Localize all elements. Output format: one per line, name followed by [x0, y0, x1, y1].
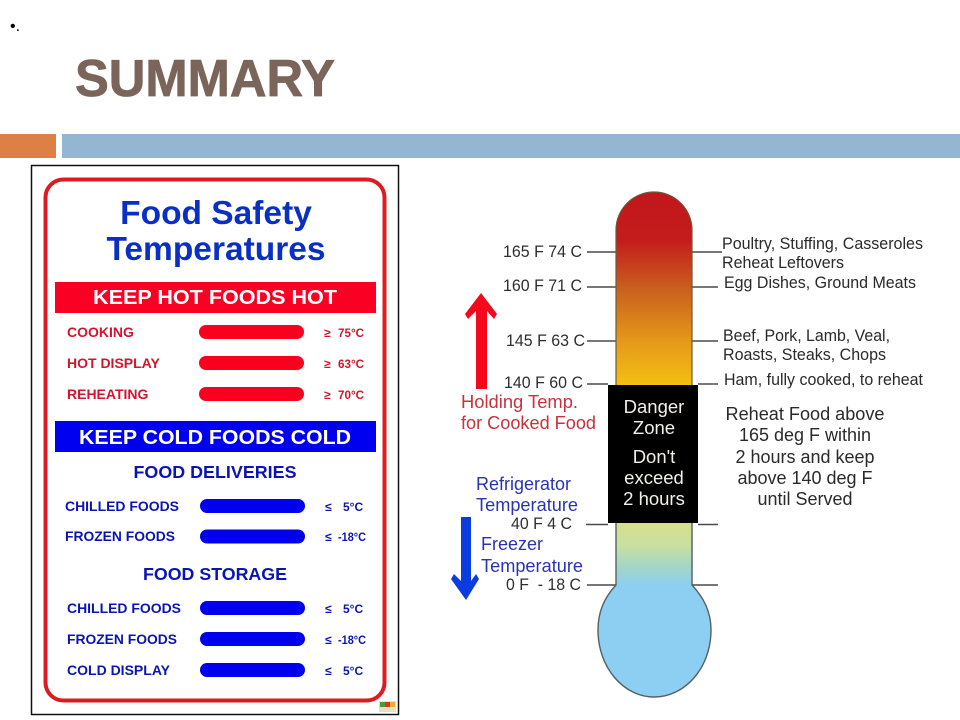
food labels: Beef, Pork, Lamb, Veal, — [723, 327, 890, 345]
poster heading: Food Safety — [120, 195, 312, 232]
food labels: Reheat Leftovers — [722, 254, 844, 272]
food deliveries rows: 5°C — [343, 500, 363, 514]
temperature labels: 40 F 4 C — [511, 515, 572, 533]
hot foods rows: COOKING — [67, 324, 134, 340]
temperature labels: 165 F 74 C — [503, 243, 582, 261]
thermometer cold tube and bulb — [598, 522, 711, 697]
food deliveries rows: ≤ — [325, 500, 332, 514]
title: SUMMARY — [75, 50, 335, 108]
reheat instructions — [726, 404, 884, 509]
food deliveries rows: FROZEN FOODS — [65, 528, 175, 544]
danger zone box: Danger — [624, 396, 684, 417]
food storage rows: -18°C — [338, 633, 366, 647]
banner: keep cold foods cold: KEEP COLD FOODS COLD — [79, 427, 351, 449]
label: freezer temperature: Freezer — [481, 533, 543, 554]
food storage rows — [67, 600, 366, 678]
hot foods rows: 63°C — [338, 357, 364, 371]
label: refrigerator temperature — [476, 473, 578, 515]
food labels: Poultry, Stuffing, Casseroles — [722, 235, 923, 253]
banner: keep hot foods hot: KEEP HOT FOODS HOT — [93, 287, 337, 309]
header bar: orange — [0, 134, 56, 158]
danger zone box: Zone — [633, 417, 675, 438]
label: holding temperature — [461, 391, 596, 433]
food storage rows: COLD DISPLAY — [67, 662, 171, 678]
reheat instructions: Reheat Food above — [726, 404, 884, 424]
food storage rows: FROZEN FOODS — [67, 631, 177, 647]
food storage rows: 5°C — [343, 664, 363, 678]
temperature labels: 160 F 71 C — [503, 277, 582, 295]
danger zone box: 2 hours — [623, 488, 685, 509]
food deliveries rows — [65, 498, 366, 544]
thermometer hot tube — [616, 192, 692, 386]
tick lines — [586, 252, 722, 585]
food storage rows: CHILLED FOODS — [67, 600, 181, 616]
arrow: freezer down — [451, 517, 479, 600]
hot foods rows: 75°C — [338, 326, 364, 340]
subheading: food storage: FOOD STORAGE — [143, 564, 287, 584]
food deliveries rows: -18°C — [338, 530, 366, 544]
food storage rows: ≤ — [325, 602, 332, 616]
temperature labels: 145 F 63 C — [506, 332, 585, 350]
temperature labels: 140 F 60 C — [504, 374, 583, 392]
label: refrigerator temperature: Refrigerator — [476, 473, 571, 494]
hot foods rows: ≥ — [324, 388, 331, 402]
banner: keep cold foods cold — [55, 421, 376, 452]
thermometer — [451, 192, 923, 697]
hot foods rows: ≥ — [324, 326, 331, 340]
hot foods rows: REHEATING — [67, 386, 149, 402]
poster heading: Temperatures — [106, 231, 326, 268]
banner: keep hot foods hot — [55, 282, 376, 313]
label: refrigerator temperature: Temperature — [476, 494, 578, 515]
food labels — [722, 235, 923, 389]
poster logo — [379, 701, 396, 712]
food storage rows: ≤ — [325, 633, 332, 647]
danger zone box: Don't — [633, 446, 675, 467]
label: freezer temperature — [481, 533, 583, 576]
label: holding temperature: for Cooked Food — [461, 412, 596, 433]
danger zone box: exceed — [624, 467, 684, 488]
danger zone box — [608, 385, 698, 523]
hot foods rows: HOT DISPLAY — [67, 355, 160, 371]
hot foods rows: 70°C — [338, 388, 364, 402]
reheat instructions: 165 deg F within — [739, 425, 871, 445]
food storage rows: ≤ — [325, 664, 332, 678]
hot foods rows — [67, 324, 364, 402]
reheat instructions: 2 hours and keep — [735, 447, 875, 467]
arrow: holding temperature up — [465, 293, 497, 389]
food labels: Egg Dishes, Ground Meats — [724, 274, 916, 292]
subheading: food deliveries: FOOD DELIVERIES — [134, 462, 296, 482]
reheat instructions: until Served — [757, 489, 853, 509]
hot foods rows: ≥ — [324, 357, 331, 371]
label: freezer temperature: Temperature — [481, 555, 583, 576]
food deliveries rows: ≤ — [325, 530, 332, 544]
temperature labels: 0 F - 18 C — [506, 576, 581, 594]
food labels: Roasts, Steaks, Chops — [723, 346, 886, 364]
panel: food safety temperatures poster — [32, 166, 398, 714]
poster heading — [106, 195, 326, 268]
food labels: Ham, fully cooked, to reheat — [724, 371, 923, 389]
header bar: blue — [62, 134, 960, 158]
food deliveries rows: CHILLED FOODS — [65, 498, 179, 514]
label: holding temperature: Holding Temp. — [461, 391, 578, 412]
poster red rounded border — [46, 180, 384, 700]
food storage rows: 5°C — [343, 602, 363, 616]
bullet mark: •. — [10, 18, 20, 35]
reheat instructions: above 140 deg F — [737, 468, 873, 488]
temperature labels — [503, 243, 585, 594]
